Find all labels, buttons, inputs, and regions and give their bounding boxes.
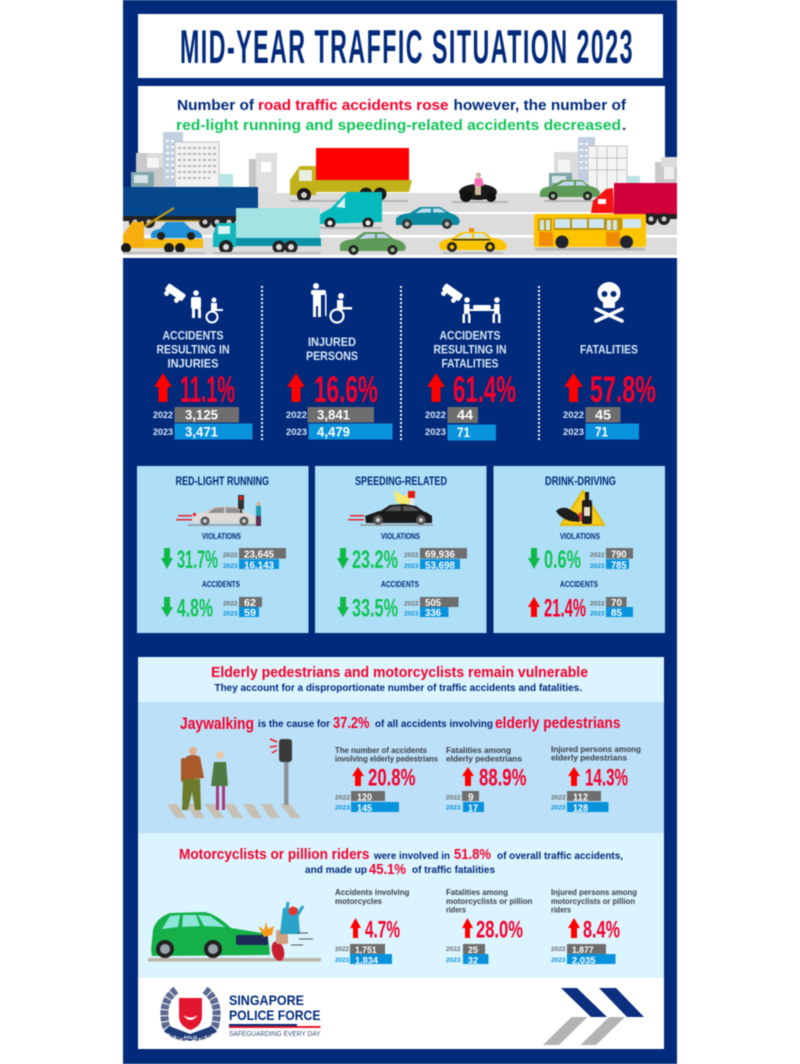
road scene illustration [121, 86, 677, 258]
icon: bottle and crashed car warning sign [556, 491, 604, 525]
panel: speeding-related: 33.5% [352, 594, 398, 622]
stat: injured motorcyclists [551, 888, 637, 966]
stat: accidents resulting in injuries: 2022 [153, 410, 173, 420]
stat: injured persons among elderly pedestrians: 2023 [551, 804, 566, 812]
stat: accidents involving elderly pedestrians: 120 [357, 792, 372, 804]
icon: crash and stretcher [439, 283, 500, 323]
stat: fatalities among motorcyclists: Fatalities among [446, 888, 508, 897]
stat: injured persons [286, 283, 392, 440]
stat: accidents resulting in injuries: 3,125 [185, 408, 218, 422]
icon: injured persons [311, 283, 352, 322]
stat: accidents involving motorcycles: Accidents involving [335, 888, 410, 897]
stat: accidents involving motorcycles: 4.7% [365, 916, 400, 944]
panel: drink-driving: ACCIDENTS [560, 579, 598, 589]
stat: fatalities among motorcyclists: 28.0% [476, 916, 523, 944]
heading: jaywalking: 37.2% [333, 715, 370, 732]
stat: accidents resulting in injuries [153, 283, 252, 440]
subtitle: however, the number of [454, 97, 627, 114]
stat: injured persons: PERSONS [306, 351, 358, 363]
panel: red-light running: 2022 [223, 600, 238, 608]
stat: fatalities: 2023 [563, 427, 584, 437]
stat: injured persons among elderly pedestrians: 112 [573, 792, 588, 804]
panel: drink-driving: 70 [611, 598, 622, 609]
stat: fatalities among motorcyclists: 2023 [446, 957, 461, 964]
stat: injured persons among elderly pedestrians: 128 [573, 804, 588, 814]
arrow down [161, 548, 173, 569]
taxi [439, 228, 507, 254]
stat: fatalities: 2022 [563, 410, 584, 420]
icon: car running a red light [176, 495, 261, 526]
stat: injured motorcyclists: 1,877 [572, 945, 594, 956]
panel: speeding-related: 2023 [404, 563, 419, 570]
arrow up [528, 597, 540, 617]
panel: speeding-related: SPEEDING-RELATED [355, 476, 447, 488]
stat: fatalities: 57.8% [590, 369, 656, 410]
stat: injured persons: 2023 [286, 427, 307, 437]
panel: drink-driving: VIOLATIONS [560, 531, 600, 541]
stat: injured persons: 2022 [286, 410, 307, 420]
subtitle [176, 97, 627, 134]
stat: fatalities among elderly pedestrians [446, 746, 527, 814]
stat: accidents involving motorcycles: 1,751 [355, 945, 377, 956]
arrow up [564, 373, 583, 402]
illustration: elderly couple at crossing [167, 739, 301, 818]
panel: drink-driving: 85 [611, 608, 622, 619]
stat: fatalities among motorcyclists: 32 [468, 956, 478, 966]
panel: drink-driving: 790 [611, 550, 627, 560]
panel: speeding-related: 2022 [404, 600, 419, 608]
arrow up [287, 373, 305, 402]
stat: accidents resulting in injuries: RESULTING IN [156, 344, 230, 356]
stat: injured motorcyclists: Injured persons among [551, 888, 637, 897]
subtitle: road traffic accidents rose [258, 97, 448, 114]
panel: drink-driving: 2023 [590, 610, 605, 618]
stat: injured persons: 3,841 [317, 408, 350, 422]
stat: accidents involving elderly pedestrians: 2023 [335, 804, 350, 812]
panel: red-light running: RED-LIGHT RUNNING [176, 476, 269, 488]
logo: police crest: POLIS [184, 1035, 197, 1040]
subtitle: red-light running and speeding-related accidents decreased [176, 117, 621, 134]
stat: injured motorcyclists: motorcyclists or pillion [551, 897, 635, 906]
panel: speeding-related: 2022 [404, 552, 419, 559]
green car [340, 232, 406, 255]
panel: red-light running: 31.7% [177, 546, 218, 574]
panel: drink-driving: 785 [611, 560, 627, 572]
arrow up [568, 767, 580, 786]
panel: speeding-related: 2023 [404, 610, 419, 618]
panel: elderly pedestrians [138, 702, 664, 833]
footer [138, 978, 664, 1049]
panel: speeding-related: 505 [425, 598, 441, 609]
arrow down [337, 597, 349, 617]
arrow down [337, 548, 349, 569]
stat: accidents involving elderly pedestrians: The number of accidents [335, 746, 427, 755]
arrow up [462, 918, 473, 938]
stat: accidents resulting in injuries: 2023 [153, 427, 173, 437]
panel: vulnerable road users heading [138, 657, 664, 702]
stat: accidents involving elderly pedestrians: 145 [357, 804, 372, 814]
stat: accidents involving elderly pedestrians: 20.8% [368, 764, 416, 792]
panel: drink-driving: 2022 [590, 552, 605, 559]
stat: injured persons among elderly pedestrians: 14.3% [585, 764, 628, 792]
stat: accidents resulting in fatalities: 44 [457, 408, 474, 422]
arrow up [462, 767, 474, 786]
heading: motorcyclists [179, 847, 623, 878]
panel: red-light running: 16,143 [244, 560, 274, 572]
red truck [290, 148, 412, 202]
arrow down [528, 548, 540, 569]
panel: red-light running: 2022 [223, 552, 238, 559]
panel: red-light running: 62 [244, 598, 256, 609]
stat: accidents involving motorcycles: 1,834 [355, 956, 379, 966]
panel: red-light running: 23,645 [244, 550, 274, 560]
heading: motorcyclists: 45.1% [369, 862, 406, 878]
teal car [396, 207, 460, 229]
motorcycle rider [452, 172, 508, 203]
stat: injured motorcyclists: 2022 [551, 946, 566, 953]
arrow up [427, 373, 445, 402]
stat: fatalities: FATALITIES [580, 344, 638, 356]
stat: injured motorcyclists: 2,035 [572, 956, 596, 966]
heading: jaywalking: Jaywalking [180, 715, 254, 733]
stat: accidents resulting in injuries: ACCIDENTS [162, 330, 224, 342]
panel: drink-driving: 2022 [590, 600, 605, 608]
subtitle: . [622, 117, 626, 134]
arrow down [161, 597, 173, 617]
stat: injured persons: 4,479 [317, 424, 350, 440]
panel: red-light running: 59 [244, 608, 256, 619]
arrow up [154, 373, 172, 402]
stat: fatalities [563, 282, 656, 440]
logo: police crest [164, 990, 217, 1041]
tow truck [121, 208, 205, 254]
stat: accidents resulting in fatalities: 71 [457, 425, 470, 440]
stat: accidents involving motorcycles: 2023 [335, 957, 349, 964]
teal truck [213, 208, 321, 254]
icon: crash and injured persons [162, 283, 223, 322]
stat: fatalities among elderly pedestrians: Fatalities among [446, 746, 511, 755]
panel: speeding-related [315, 466, 486, 633]
stat: injured persons: 16.6% [314, 369, 378, 410]
bus [534, 214, 646, 250]
stat: accidents involving motorcycles: motorcycles [335, 897, 382, 906]
stat: injured motorcyclists: 8.4% [583, 916, 620, 944]
road [123, 193, 677, 255]
stat: injured persons among elderly pedestrians [551, 745, 641, 814]
logo: Singapore Police Force wordmark: SAFEGUARDING EVERY DAY [229, 1029, 320, 1038]
panel: red-light running: 2023 [223, 610, 238, 618]
stat: accidents involving elderly pedestrians [335, 746, 438, 814]
panel: red-light running [137, 466, 308, 633]
stat: accidents resulting in fatalities [425, 283, 516, 440]
divider lines [262, 286, 539, 441]
panel: speeding-related: 53,698 [425, 560, 455, 572]
panel: vulnerable road users heading: They account for a disproportionate number of traffic accidents and fatalities. [214, 682, 582, 694]
stat: accidents involving elderly pedestrians: 2022 [335, 794, 350, 802]
panel: drink-driving: 2023 [590, 563, 605, 570]
arrow up [350, 918, 361, 938]
stat: fatalities among motorcyclists: motorcyclists or pillion [446, 897, 532, 906]
stat: injured motorcyclists: riders [551, 906, 571, 914]
stat: injured motorcyclists: 2023 [551, 957, 566, 964]
stat: accidents involving motorcycles [335, 888, 410, 966]
stat: fatalities: 71 [595, 424, 608, 440]
panel: speeding-related: 69,936 [425, 550, 455, 560]
icon: chevrons [543, 988, 644, 1045]
arrow up [568, 918, 580, 938]
stat: accidents resulting in fatalities: FATALITIES [442, 358, 499, 370]
heading: jaywalking: elderly pedestrians [495, 715, 620, 732]
arrow up [352, 767, 364, 786]
green car far [540, 180, 600, 202]
panel: drink-driving: 0.6% [544, 546, 581, 574]
panel: drink-driving: 21.4% [544, 594, 586, 622]
stat: fatalities among elderly pedestrians: 2022 [446, 794, 461, 802]
stat: fatalities among elderly pedestrians: elderly pedestrians [446, 754, 522, 764]
panel: red-light running: VIOLATIONS [202, 531, 241, 541]
panel: vulnerable road users heading: Elderly pedestrians and motorcyclists remain vulnerable [211, 664, 588, 681]
stat: fatalities: 45 [595, 408, 612, 422]
heading: jaywalking: of all accidents involving [375, 718, 493, 730]
panel: speeding-related: 336 [425, 608, 441, 619]
panel: red-light running: ACCIDENTS [202, 579, 240, 589]
stat: accidents resulting in injuries: 11.1% [180, 369, 235, 410]
panel: red-light running: 2023 [223, 563, 238, 570]
stat: accidents resulting in fatalities: 2023 [425, 427, 446, 437]
stat: fatalities among motorcyclists: riders [446, 906, 466, 914]
heading: jaywalking [180, 715, 620, 733]
stat: accidents involving motorcycles: 2022 [335, 946, 349, 953]
stat: accidents resulting in fatalities: ACCIDENTS [440, 330, 501, 342]
stat: fatalities among motorcyclists: 2022 [446, 946, 461, 953]
illustration: car hitting motorcyclist [148, 902, 321, 962]
title [138, 14, 663, 78]
icon: speeding black car [348, 490, 433, 526]
heading: motorcyclists: were involved in [373, 850, 450, 862]
stat: accidents involving elderly pedestrians: involving elderly pedestrians [335, 754, 438, 764]
panel: drink-driving [494, 466, 665, 633]
heading: motorcyclists: Motorcyclists or pillion riders [179, 847, 370, 863]
icon: skull and crossbones [596, 282, 622, 321]
stat: injured persons among elderly pedestrians: elderly pedestrians [551, 754, 627, 762]
panel: motorcyclists [138, 833, 664, 978]
panel: speeding-related: 23.2% [352, 546, 398, 574]
stat: fatalities among motorcyclists [446, 888, 532, 966]
stat: accidents resulting in fatalities: 61.4% [453, 369, 516, 410]
panel: red-light running: 4.8% [177, 594, 213, 622]
logo: Singapore Police Force wordmark [229, 992, 320, 1038]
stat: accidents resulting in fatalities: RESULTING IN [434, 344, 506, 356]
stat: injured persons among elderly pedestrians: 2022 [551, 794, 566, 802]
logo: Singapore Police Force wordmark: POLICE FORCE [229, 1007, 320, 1023]
heading: jaywalking: is the cause for [258, 718, 330, 730]
stat: fatalities among elderly pedestrians: 9 [468, 792, 474, 804]
logo: Singapore Police Force wordmark: SINGAPORE [229, 992, 304, 1008]
stat: injured persons: INJURED [308, 337, 356, 349]
subtitle: Number of [177, 97, 255, 114]
stat: injured persons among elderly pedestrians: Injured persons among [551, 745, 641, 754]
stat: fatalities among motorcyclists: 25 [468, 945, 479, 956]
heading: motorcyclists: of traffic fatalities [412, 864, 495, 876]
heading: motorcyclists: of overall traffic accidents, [497, 850, 623, 862]
stat: accidents resulting in fatalities: 2022 [425, 410, 446, 420]
stat: fatalities among elderly pedestrians: 88.9% [479, 764, 527, 792]
stat: fatalities among elderly pedestrians: 17 [468, 804, 478, 814]
red container truck [591, 183, 677, 225]
heading: motorcyclists: and made up [305, 864, 367, 876]
stat: fatalities among elderly pedestrians: 2023 [446, 804, 461, 812]
panel: speeding-related: VIOLATIONS [381, 531, 420, 541]
stat: accidents resulting in injuries: 3,471 [185, 424, 218, 440]
teal van [320, 192, 382, 229]
blue container truck [123, 187, 258, 228]
panel: speeding-related: ACCIDENTS [381, 579, 419, 589]
stat: accidents resulting in injuries: INJURIES [168, 358, 219, 370]
panel: drink-driving: DRINK-DRIVING [545, 476, 616, 488]
heading: motorcyclists: 51.8% [454, 847, 491, 863]
buildings [131, 132, 677, 193]
